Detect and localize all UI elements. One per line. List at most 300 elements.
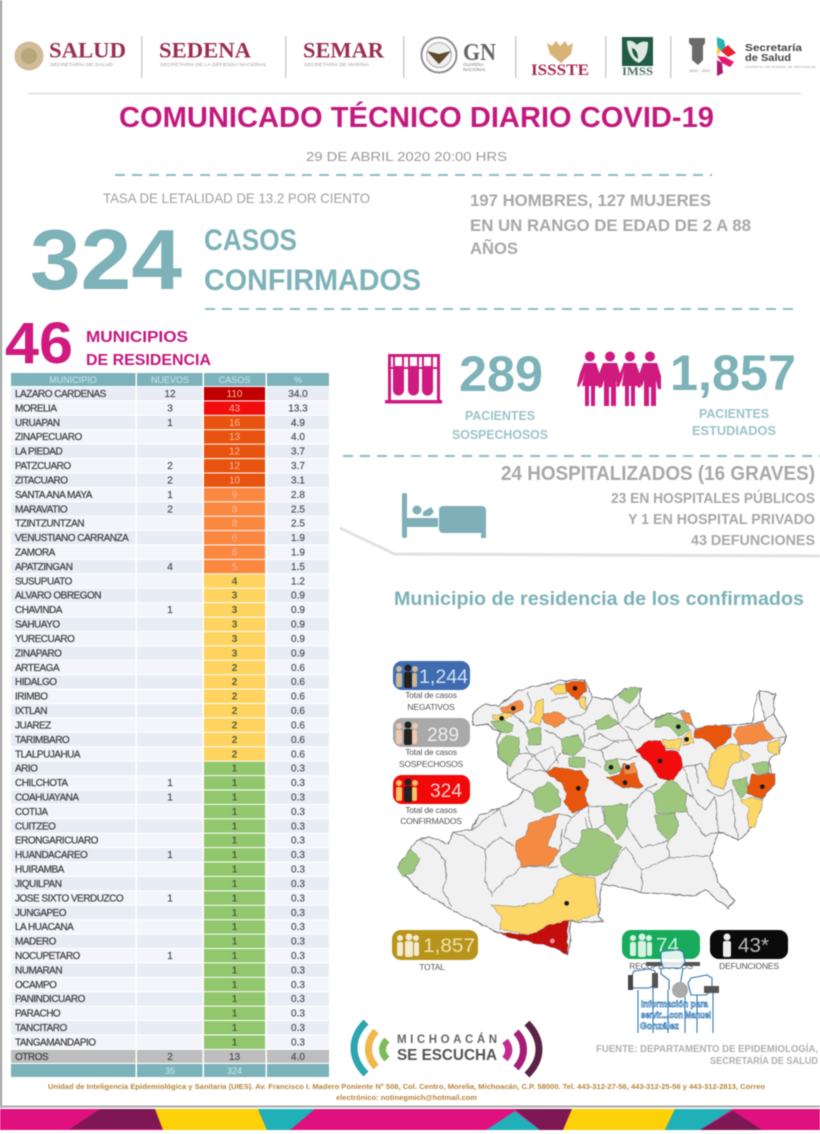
table header: CASOS — [219, 375, 250, 385]
row: Tzintzuntzan: TZINTZUNTZAN — [15, 519, 84, 530]
row: Panindicuaro: 0.3 — [291, 994, 305, 1005]
municipalities count: 46 — [5, 311, 73, 376]
row: Tzintzuntzan: 2.5 — [291, 519, 305, 530]
row: Irimbo: IRIMBO — [15, 692, 48, 703]
row: Huandacareo: 1 — [232, 850, 238, 861]
row: totals: 324 — [227, 1066, 242, 1076]
row: Ixtlan: 0.6 — [291, 706, 305, 717]
row: Zinaparo: 0.9 — [291, 648, 305, 659]
row: Apatzingan: APATZINGAN — [15, 562, 73, 573]
legend: negative cases — [393, 661, 470, 712]
legend: negative cases: Total de casos — [405, 690, 457, 700]
suspected patients label: SOSPECHOSOS — [452, 427, 548, 442]
legend: negative cases: NEGATIVOS — [407, 702, 455, 712]
date: 29 DE ABRIL 2020 20:00 HRS — [306, 149, 507, 164]
row: La Huacana — [11, 920, 329, 934]
row: Ixtlan: 2 — [232, 706, 238, 717]
row: Jungapeo: 0.3 — [291, 908, 305, 919]
row: Tlalpujahua: TLALPUJAHUA — [15, 749, 81, 760]
logo: Sedena — [159, 38, 268, 67]
row: Patzcuaro: 2 — [167, 461, 173, 472]
row: Jose Sixto Verduzco — [11, 891, 329, 905]
row: Maravatio: 8 — [232, 504, 238, 515]
row: Uruapan: 1 — [167, 418, 173, 429]
hospitalization text: 43 DEFUNCIONES — [691, 532, 815, 549]
row: Cuitzeo: CUITZEO — [15, 821, 56, 832]
row: Zamora: 1.9 — [291, 548, 305, 558]
row: Huiramba: 0.3 — [291, 864, 305, 876]
row: Tzintzuntzan — [11, 517, 329, 530]
watermark: raised fists — [628, 950, 719, 1033]
row: Erongaricuaro — [11, 834, 329, 847]
row: Tangamandapio — [11, 1036, 329, 1049]
row: Morelia: 3 — [167, 403, 173, 414]
row: Chilchota: 1 — [232, 778, 238, 789]
row: Tangamandapio: 0.3 — [291, 1038, 305, 1048]
row: Tlalpujahua — [11, 747, 329, 761]
row: Jungapeo — [11, 906, 329, 919]
row: Morelia: 43 — [229, 403, 240, 414]
row: Patzcuaro: 12 — [229, 461, 240, 472]
row: Zinapecuaro: ZINAPECUARO — [15, 432, 82, 443]
row: Otros: 2 — [167, 1052, 173, 1063]
logo: ISSSTE: ISSSTE — [531, 62, 589, 79]
row: Zinapecuaro — [11, 430, 329, 444]
municipalities count — [5, 311, 211, 376]
logo: Guardia Nacional: GN — [463, 40, 497, 66]
row: Santa Ana Maya: SANTA ANA MAYA — [15, 490, 93, 501]
row: Jose Sixto Verduzco: 1 — [167, 893, 173, 904]
legend: recovered — [622, 930, 700, 971]
legend: suspected cases: SOSPECHOSOS — [399, 759, 463, 769]
row: Yurecuaro: 0.9 — [291, 634, 305, 645]
table header — [11, 373, 329, 386]
legend: deaths — [710, 930, 788, 971]
legend: suspected cases: 289 — [427, 725, 459, 746]
row: Jungapeo: 1 — [232, 908, 238, 919]
row: Coahuayana: COAHUAYANA — [15, 792, 79, 804]
row: Hidalgo: 2 — [232, 677, 238, 688]
logo: Salud: SECRETARÍA DE SALUD — [50, 61, 114, 67]
row: Zinaparo: 3 — [232, 648, 238, 659]
row: Patzcuaro: 3.7 — [291, 461, 305, 472]
row: Uruapan: 4.9 — [291, 418, 305, 429]
watermark: raised fists: González — [640, 1021, 679, 1032]
logo: Salud: SALUD — [49, 38, 126, 62]
row: Tancitaro: 1 — [232, 1023, 238, 1034]
row: Coahuayana: 0.3 — [291, 792, 305, 804]
row: Zinaparo — [11, 646, 329, 660]
row: Coahuayana: 1 — [167, 792, 173, 804]
row: Santa Ana Maya: 1 — [167, 490, 173, 501]
logo: Michoacan se escucha: MICHOACÁN — [397, 1033, 497, 1046]
row: Patzcuaro — [11, 459, 329, 472]
row: Jose Sixto Verduzco: JOSE SIXTO VERDUZCO — [15, 893, 124, 904]
row: Juarez: 2 — [232, 720, 238, 731]
demographics text — [470, 191, 751, 258]
row: Venustiano Carranza: 1.9 — [291, 533, 305, 544]
row: Jungapeo: JUNGAPEO — [15, 908, 67, 919]
row: Juarez: JUAREZ — [15, 720, 51, 731]
row: La Piedad — [11, 445, 329, 458]
row: Chilchota: 0.3 — [291, 778, 305, 789]
row: Ario — [11, 762, 329, 775]
row: Numaran: 0.3 — [291, 965, 305, 976]
row: Sahuayo — [11, 618, 329, 631]
footer address — [48, 1082, 765, 1102]
row: La Piedad: 12 — [229, 447, 240, 458]
municipalities count: DE RESIDENCIA — [86, 352, 211, 369]
row: Tangamandapio: TANGAMANDAPIO — [15, 1038, 96, 1048]
row: Apatzingan: 4 — [167, 562, 173, 573]
row: Paracho — [11, 1007, 329, 1020]
row: Tancitaro — [11, 1021, 329, 1034]
row: Uruapan: 16 — [229, 418, 240, 429]
row: Chilchota: 1 — [167, 778, 173, 789]
row: Chavinda: CHAVINDA — [15, 605, 63, 616]
row: totals: 35 — [165, 1066, 175, 1076]
studied patients number: 1,857 — [670, 345, 796, 401]
watermark: raised fists: servir....con Manuel — [641, 1010, 711, 1021]
row: Tarimbaro: 2 — [232, 735, 238, 746]
row: Nocupetaro: 1 — [232, 951, 238, 962]
row: Numaran — [11, 963, 329, 977]
row: Paracho: 1 — [232, 1009, 238, 1020]
suspected patients label: PACIENTES — [465, 408, 535, 423]
row: Jiquilpan: 1 — [232, 879, 238, 890]
legend: suspected cases: Total de casos — [405, 747, 457, 757]
row: Patzcuaro: PATZCUARO — [15, 461, 71, 472]
row: Huandacareo: 1 — [167, 850, 173, 861]
row: Sahuayo: 0.9 — [291, 620, 305, 631]
row: Ario: 0.3 — [291, 764, 305, 775]
row: Madero: 0.3 — [291, 937, 305, 948]
logo: Guardia Nacional: NACIONAL — [463, 67, 487, 72]
row: Morelia — [11, 401, 329, 415]
row: Tlalpujahua: 2 — [232, 749, 238, 760]
logo: Secretaría de Salud Michoacán: de Salud — [745, 52, 791, 64]
row: Maravatio: MARAVATIO — [15, 504, 68, 515]
row: Paracho: 0.3 — [291, 1009, 305, 1020]
title: COMUNICADO TÉCNICO DIARIO COVID-19 — [119, 100, 714, 134]
row: Huandacareo: HUANDACAREO — [15, 850, 88, 861]
row: Chavinda: 1 — [167, 605, 173, 616]
legend: confirmed cases: 324 — [430, 781, 462, 802]
row: Zinapecuaro: 13 — [229, 432, 240, 443]
row: Cotija: 1 — [232, 807, 238, 818]
row: Zitacuaro: ZITACUARO — [15, 476, 68, 486]
icon: test tubes — [385, 354, 442, 404]
hospitalization text — [501, 463, 815, 549]
row: Tarimbaro: 0.6 — [291, 735, 305, 746]
row: Panindicuaro: PANINDICUARO — [15, 994, 86, 1005]
row: Lazaro Cardenas: 34.0 — [288, 389, 308, 400]
row: Jose Sixto Verduzco: 1 — [232, 893, 238, 904]
studied patients label: ESTUDIADOS — [692, 423, 776, 438]
logo: Secretaría de Salud Michoacán: Secretaría — [745, 42, 802, 54]
logo: Secretaría de Salud Michoacán — [689, 37, 816, 76]
legend: total — [392, 930, 478, 972]
legend: recovered: 74 — [656, 935, 679, 957]
row: Cuitzeo: 0.3 — [291, 821, 305, 832]
row: Madero: MADERO — [15, 937, 57, 948]
municipalities count: MUNICIPIOS — [86, 329, 188, 346]
row: Ixtlan: IXTLAN — [15, 706, 47, 717]
legend: confirmed cases: CONFIRMADOS — [400, 816, 462, 826]
row: Morelia: MORELIA — [15, 403, 57, 414]
row: Maravatio: 2.5 — [291, 504, 305, 515]
row: Huiramba — [11, 862, 329, 876]
row: Alvaro Obregon: 0.9 — [291, 591, 305, 602]
row: Tancitaro: TANCITARO — [15, 1023, 68, 1034]
row: Irimbo: 2 — [232, 692, 238, 703]
row: Tzintzuntzan: 8 — [232, 519, 238, 530]
hospitalization text: Y 1 EN HOSPITAL PRIVADO — [628, 511, 815, 528]
row: Venustiano Carranza: VENUSTIANO CARRANZA — [15, 533, 129, 544]
row: Yurecuaro — [11, 632, 329, 645]
row: Lazaro Cardenas: LAZARO CARDENAS — [15, 389, 107, 400]
row: Jiquilpan — [11, 877, 329, 890]
row: Cuitzeo — [11, 819, 329, 833]
row: Arteaga: 2 — [232, 663, 238, 674]
row: Chavinda: 0.9 — [291, 605, 305, 616]
row: Chilchota: CHILCHOTA — [15, 778, 68, 789]
death markers — [499, 686, 765, 943]
row: Otros: 4.0 — [291, 1052, 305, 1063]
row: Jiquilpan: JIQUILPAN — [15, 879, 62, 890]
row: La Piedad: LA PIEDAD — [15, 447, 62, 458]
row: Ocampo: 1 — [232, 980, 238, 991]
row: Chilchota — [11, 776, 329, 790]
row: Nocupetaro: NOCUPETARO — [15, 951, 81, 962]
legend: confirmed cases — [393, 775, 470, 826]
row: Coahuayana: 1 — [232, 792, 238, 804]
municipal boundaries — [420, 690, 787, 907]
row: Panindicuaro — [11, 992, 329, 1006]
row: Susupuato: 1.2 — [291, 576, 305, 587]
logo: Michoacan se escucha — [354, 1022, 539, 1075]
row: Apatzingan: 5 — [232, 562, 238, 573]
footer address: Unidad de Inteligencia Epidemiológica y Sanitaria (UIES). Av. Francisco I. Madero Poniente N° 508, Col. Centro, Morelia, Michoacán, C.P. 58000. Tel. 443-312-27-56, 443-312-25-56 y 443-312-2813, Correo — [48, 1082, 765, 1091]
logo: Michoacan se escucha: SE ESCUCHA — [397, 1047, 497, 1064]
table header: % — [294, 375, 302, 385]
row: Morelia: 13.3 — [288, 403, 308, 414]
logo: Secretaría de Salud Michoacán: Gobierno del Estado de Michoacán — [745, 65, 816, 69]
logo: IMSS — [622, 37, 653, 78]
legend: recovered: RECUPERADOS — [629, 961, 693, 971]
row: Ario: 1 — [232, 764, 238, 775]
row: Erongaricuaro: 1 — [232, 836, 238, 847]
logo: Guardia Nacional: GUARDIA — [463, 62, 484, 67]
row: Jiquilpan: 0.3 — [291, 879, 305, 890]
row: Arteaga — [11, 661, 329, 674]
confirmed cases label: CONFIRMADOS — [204, 264, 421, 297]
row: Irimbo — [11, 690, 329, 703]
row: Nocupetaro: 1 — [167, 951, 173, 962]
row: Zitacuaro — [11, 474, 329, 487]
demographics text: EN UN RANGO DE EDAD DE 2 A 88 — [470, 216, 751, 235]
row: Arteaga: 0.6 — [291, 663, 305, 674]
row: Ixtlan — [11, 704, 329, 717]
logo: Sedena: SEDENA — [159, 38, 251, 62]
row: Erongaricuaro: 0.3 — [291, 836, 305, 847]
row: Zamora — [11, 546, 329, 559]
row: Tangamandapio: 1 — [232, 1038, 238, 1048]
legend: deaths: 43* — [738, 935, 769, 957]
row: Yurecuaro: 3 — [232, 634, 238, 645]
demographics text: AÑOS — [470, 238, 518, 258]
row: Ocampo: 0.3 — [291, 980, 305, 991]
studied patients label: PACIENTES — [699, 406, 769, 421]
row: Otros — [11, 1050, 329, 1063]
row: Santa Ana Maya — [11, 488, 329, 501]
logo: ISSSTE — [531, 41, 589, 79]
row: La Huacana: 1 — [232, 922, 238, 933]
logo: Guardia Nacional — [422, 38, 497, 72]
row: Ocampo: OCAMPO — [15, 980, 57, 991]
suspected patients number: 289 — [459, 346, 543, 402]
row: Huiramba: HUIRAMBA — [15, 864, 65, 876]
colored municipalities — [398, 682, 780, 955]
row: Tarimbaro: TARIMBARO — [15, 735, 70, 746]
table header: MUNICIPIO — [49, 375, 97, 385]
logo: IMSS: IMSS — [622, 64, 653, 78]
row: La Piedad: 3.7 — [291, 447, 305, 458]
row: Sahuayo: SAHUAYO — [15, 620, 60, 631]
logo: Semar: SEMAR — [303, 38, 385, 62]
row: Alvaro Obregon: ALVARO OBREGON — [15, 591, 101, 602]
header logos — [14, 36, 816, 79]
row: Santa Ana Maya: 9 — [232, 490, 238, 501]
confirmed cases number: 324 — [30, 213, 182, 308]
confirmed cases label — [204, 224, 421, 297]
row: Tarimbaro — [11, 733, 329, 746]
row: Otros: OTROS — [15, 1052, 49, 1063]
row: Nocupetaro — [11, 949, 329, 962]
row: Nocupetaro: 0.3 — [291, 951, 305, 962]
logo: Semar: SECRETARÍA DE MARINA — [304, 61, 369, 67]
legend: negative cases: 1,244 — [419, 667, 468, 688]
lethality rate: TASA DE LETALIDAD DE 13.2 POR CIENTO — [103, 190, 370, 206]
row: Coahuayana — [11, 790, 329, 804]
row: Apatzingan: 1.5 — [291, 562, 305, 573]
row: Alvaro Obregon — [11, 589, 329, 602]
demographics text: 197 HOMBRES, 127 MUJERES — [470, 191, 711, 210]
logo: Sedena: SECRETARÍA DE LA DEFENSA NACIONAL — [160, 61, 268, 67]
row: Zinapecuaro: 4.0 — [291, 432, 305, 443]
row: Zinaparo: ZINAPARO — [15, 648, 62, 659]
row: Tlalpujahua: 0.6 — [291, 749, 305, 760]
row: Zitacuaro: 3.1 — [291, 476, 305, 486]
row: Yurecuaro: YURECUARO — [15, 634, 75, 645]
row: Juarez — [11, 718, 329, 732]
legend: total: TOTAL — [419, 962, 445, 972]
row: Uruapan: URUAPAN — [15, 418, 60, 429]
row: Otros: 13 — [229, 1052, 240, 1063]
row: totals — [11, 1064, 329, 1077]
state outline — [398, 680, 787, 955]
row: Lazaro Cardenas: 12 — [164, 389, 176, 400]
row: Sahuayo: 3 — [232, 620, 238, 631]
legend: confirmed cases: Total de casos — [405, 805, 457, 815]
map heading: Municipio de residencia de los confirmados — [394, 589, 804, 610]
row: Paracho: PARACHO — [15, 1009, 61, 1020]
row: Juarez: 0.6 — [291, 720, 305, 731]
confirmed cases label: CASOS — [204, 224, 297, 257]
row: Numaran: NUMARAN — [15, 965, 62, 976]
row: Venustiano Carranza — [11, 531, 329, 544]
row: Ario: ARIO — [15, 764, 38, 775]
legend: deaths: DEFUNCIONES — [719, 961, 779, 971]
logo: Salud — [14, 38, 126, 70]
row: Susupuato — [11, 574, 329, 588]
row: Alvaro Obregon: 3 — [232, 591, 238, 602]
row: Tancitaro: 0.3 — [291, 1023, 305, 1034]
row: Susupuato: SUSUPUATO — [15, 576, 73, 587]
icon: hospital bed — [402, 493, 486, 538]
row: Zamora: ZAMORA — [15, 548, 56, 558]
row: Madero: 1 — [232, 937, 238, 948]
row: Chavinda — [11, 603, 329, 617]
row: Ocampo — [11, 978, 329, 991]
row: Apatzingan — [11, 560, 329, 573]
map: Michoacan municipalities — [398, 680, 787, 955]
row: Lazaro Cardenas — [11, 387, 329, 400]
row: Cotija: 0.3 — [291, 807, 305, 818]
row: Zitacuaro: 10 — [229, 476, 240, 486]
row: Uruapan — [11, 416, 329, 429]
row: Arteaga: ARTEAGA — [15, 663, 60, 674]
row: La Huacana: LA HUACANA — [15, 922, 74, 933]
table header: NUEVOS — [151, 375, 189, 385]
row: Susupuato: 4 — [232, 576, 238, 587]
row: Hidalgo: 0.6 — [291, 677, 305, 688]
studied patients label — [692, 406, 776, 438]
row: Panindicuaro: 1 — [232, 994, 238, 1005]
row: Cotija — [11, 805, 329, 818]
row: Huandacareo — [11, 848, 329, 862]
row: Maravatio — [11, 502, 329, 516]
row: Huandacareo: 0.3 — [291, 850, 305, 861]
row: Maravatio: 2 — [167, 504, 173, 515]
row: Chavinda: 3 — [232, 605, 238, 616]
row: Hidalgo — [11, 675, 329, 689]
row: Venustiano Carranza: 6 — [232, 533, 238, 544]
row: Santa Ana Maya: 2.8 — [291, 490, 305, 501]
source note — [596, 1042, 818, 1067]
row: Hidalgo: HIDALGO — [15, 677, 57, 688]
row: Erongaricuaro: ERONGARICUARO — [15, 836, 99, 847]
table: municipalities — [11, 373, 329, 1077]
logo: Secretaría de Salud Michoacán: 1810 · 2021 — [689, 68, 711, 73]
legend: total: 1,857 — [423, 936, 475, 957]
row: Zamora: 6 — [232, 548, 238, 558]
suspected patients label — [452, 408, 548, 442]
row: Huiramba: 1 — [232, 864, 238, 876]
icon: people — [577, 352, 661, 406]
watermark: raised fists: Información para — [641, 999, 709, 1010]
legend: suspected cases — [393, 718, 470, 769]
footer color band — [0, 1109, 820, 1130]
row: La Huacana: 0.3 — [291, 922, 305, 933]
row: Jose Sixto Verduzco: 0.3 — [291, 893, 305, 904]
row: Zitacuaro: 2 — [167, 476, 173, 486]
row: Madero — [11, 935, 329, 948]
row: Cotija: COTIJA — [15, 807, 48, 818]
row: Cuitzeo: 1 — [232, 821, 238, 832]
row: Irimbo: 0.6 — [291, 692, 305, 703]
footer address: electrónico: notinegmich@hotmail.com — [336, 1093, 477, 1102]
